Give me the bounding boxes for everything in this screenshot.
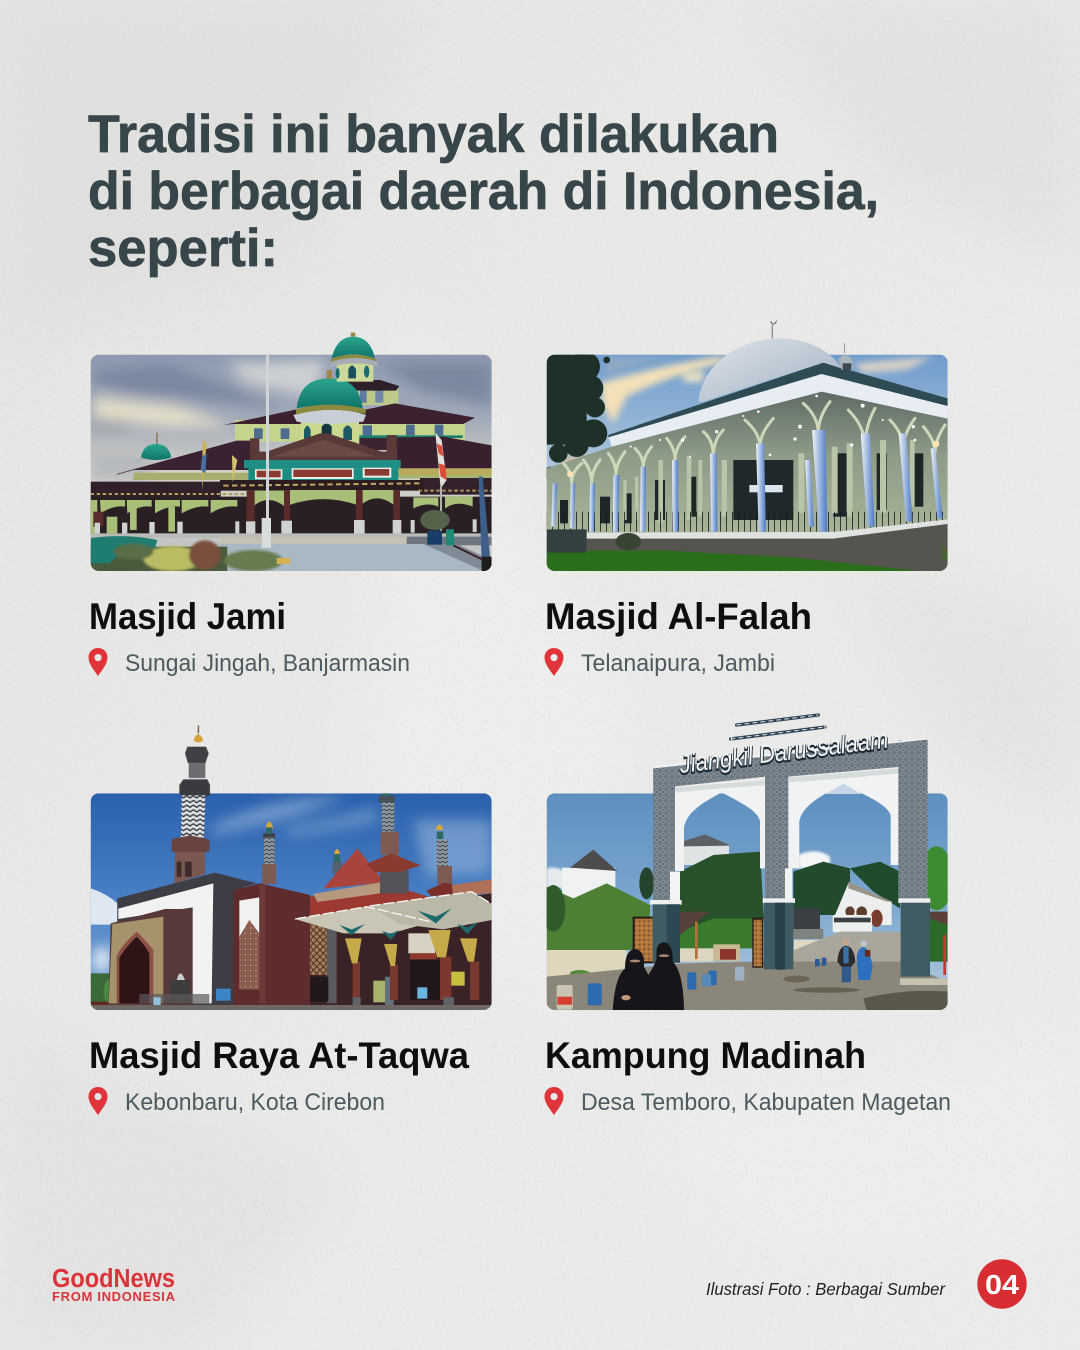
title: seperti: [88, 219, 278, 278]
tree [544, 352, 610, 480]
panel: Masjid Al-Falah [544, 321, 948, 677]
capitals [563, 402, 945, 483]
fence [547, 512, 948, 532]
front columns [551, 430, 943, 532]
top dome rising above photo [330, 333, 377, 382]
icon: location pin [88, 1087, 108, 1115]
sign text: Jiangkil Darussalaam [677, 727, 890, 780]
pillars [653, 738, 927, 787]
upper roof and lime storey [358, 388, 398, 405]
ground and lawn [547, 524, 948, 571]
grey block and white wall [117, 873, 257, 1005]
lights [567, 395, 939, 477]
fascia and roof [608, 373, 948, 447]
lower roofs [117, 441, 253, 475]
white house and bus [835, 883, 892, 925]
portal [108, 909, 193, 1005]
location: Telanaipura, Jambi: Telanaipura, Jambi [581, 650, 775, 677]
logo: GoodNews from Indonesia [52, 1265, 176, 1304]
icon: location pin [88, 648, 108, 676]
heading: Kampung Madinah: Kampung Madinah [545, 1034, 866, 1076]
panel: Masjid Jami [88, 333, 492, 677]
title: Tradisi ini banyak dilakukan [88, 105, 779, 164]
brown tower [233, 883, 310, 1007]
small minarets [262, 779, 452, 884]
garden [91, 536, 290, 571]
walkers [837, 939, 873, 982]
icon: location pin [544, 648, 564, 676]
women in niqab [613, 942, 684, 1010]
icon: location pin [544, 1087, 564, 1115]
white arches [674, 779, 767, 871]
ceiling and interior [547, 392, 948, 533]
main minaret above photo [172, 725, 210, 883]
page number badge [977, 1259, 1027, 1309]
heading: Masjid Raya At-Taqwa: Masjid Raya At-Taqwa [89, 1034, 470, 1076]
trees [541, 846, 953, 962]
main dome and drum [300, 422, 359, 444]
location: Kebonbaru, Kota Cirebon: Kebonbaru, Kota Cirebon [125, 1089, 385, 1116]
base [583, 519, 948, 539]
photo: Kampung Madinah gate [541, 715, 953, 1010]
photo: Masjid Al-Falah [544, 321, 948, 571]
title [88, 105, 879, 278]
gate above photo: Jiangkil Darussalaam [677, 726, 890, 779]
pole and flags [266, 355, 269, 518]
small dome [136, 458, 171, 462]
panel: Masjid Raya At-Taqwa [88, 725, 492, 1116]
panel: Kampung Madinah [541, 715, 953, 1116]
teal storey [244, 460, 401, 468]
back columns [623, 440, 915, 523]
wood panels [633, 917, 666, 963]
photo: Masjid Jami [91, 333, 492, 571]
lower colonnade [310, 893, 492, 1007]
photo: Masjid Raya At-Taqwa [91, 725, 492, 1010]
location: Sungai Jingah, Banjarmasin: Sungai Jingah, Banjarmasin [125, 650, 410, 677]
ground floor [91, 497, 492, 535]
page number badge: 04 [985, 1269, 1019, 1300]
logo: GoodNews from Indonesia: GoodNews [52, 1265, 175, 1293]
heading: Masjid Al-Falah: Masjid Al-Falah [545, 595, 812, 637]
heading: Masjid Jami: Masjid Jami [89, 595, 286, 637]
dome above photo [698, 321, 853, 402]
location: Desa Temboro, Kabupaten Magetan: Desa Temboro, Kabupaten Magetan [581, 1089, 951, 1116]
photo credit: Ilustrasi Foto : Berbagai Sumber [706, 1279, 946, 1299]
road, wall [790, 932, 901, 972]
title: di berbagai daerah di Indonesia, [88, 162, 879, 221]
barrels [588, 958, 826, 1005]
logo: GoodNews from Indonesia: FROM INDONESIA [52, 1289, 176, 1304]
sky seen through right arch [826, 784, 861, 794]
umbrella columns [353, 957, 479, 1000]
fountain [170, 980, 189, 1003]
plaza floor [220, 544, 483, 571]
gate above photo [650, 715, 930, 977]
upper sign [731, 715, 825, 739]
gable ornament [250, 433, 397, 460]
eaves [91, 482, 221, 498]
houses [562, 868, 615, 901]
umbrellas [296, 907, 418, 934]
red roof and cap [310, 882, 428, 916]
